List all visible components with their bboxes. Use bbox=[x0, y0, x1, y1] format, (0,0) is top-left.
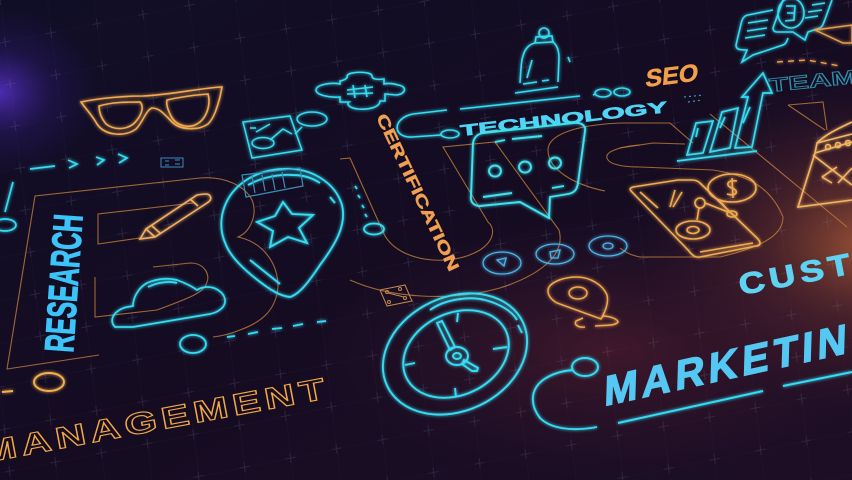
icon: growth chart bbox=[677, 73, 772, 161]
marketing underline bbox=[618, 372, 852, 423]
glasses icon bbox=[81, 87, 222, 134]
icon: cloud bbox=[112, 279, 225, 327]
TEAM label: TEAM bbox=[768, 67, 852, 97]
CERTIFICATION label: CERTIFICATION bbox=[372, 111, 462, 274]
icon: crypto chat bubbles bbox=[736, 0, 832, 62]
left arrows row bbox=[0, 154, 127, 231]
RESEARCH label: RESEARCH bbox=[36, 213, 92, 354]
dashed connector bbox=[180, 186, 384, 353]
icon: pencil bbox=[140, 194, 211, 239]
icon: location pin with star bbox=[221, 169, 343, 297]
icon: shopping bag bbox=[798, 122, 852, 207]
small media icons bbox=[483, 236, 627, 274]
icon: phone with gear bbox=[630, 174, 760, 257]
icon: puzzle network bbox=[316, 72, 405, 109]
dotted accent bbox=[684, 95, 704, 102]
icon: bell bbox=[515, 28, 570, 93]
icon: orange map pin bbox=[548, 277, 618, 327]
icon: small tablet euro bbox=[243, 112, 327, 158]
technology hook and line bbox=[397, 88, 630, 138]
big letters BUS outline bbox=[7, 102, 847, 369]
icon: speech bubble bbox=[471, 123, 585, 218]
marketing hook bbox=[533, 358, 598, 429]
orange ring marker bbox=[2, 373, 64, 392]
orange card top right bbox=[777, 25, 852, 66]
small dice icon bbox=[380, 285, 412, 306]
icon: clock bbox=[363, 271, 547, 437]
small blue chip bbox=[161, 158, 183, 167]
TECHNOLOGY label: TECHNOLOGY bbox=[460, 99, 669, 140]
pin comb stripes bbox=[242, 168, 303, 197]
SEO label: SEO bbox=[644, 59, 699, 93]
